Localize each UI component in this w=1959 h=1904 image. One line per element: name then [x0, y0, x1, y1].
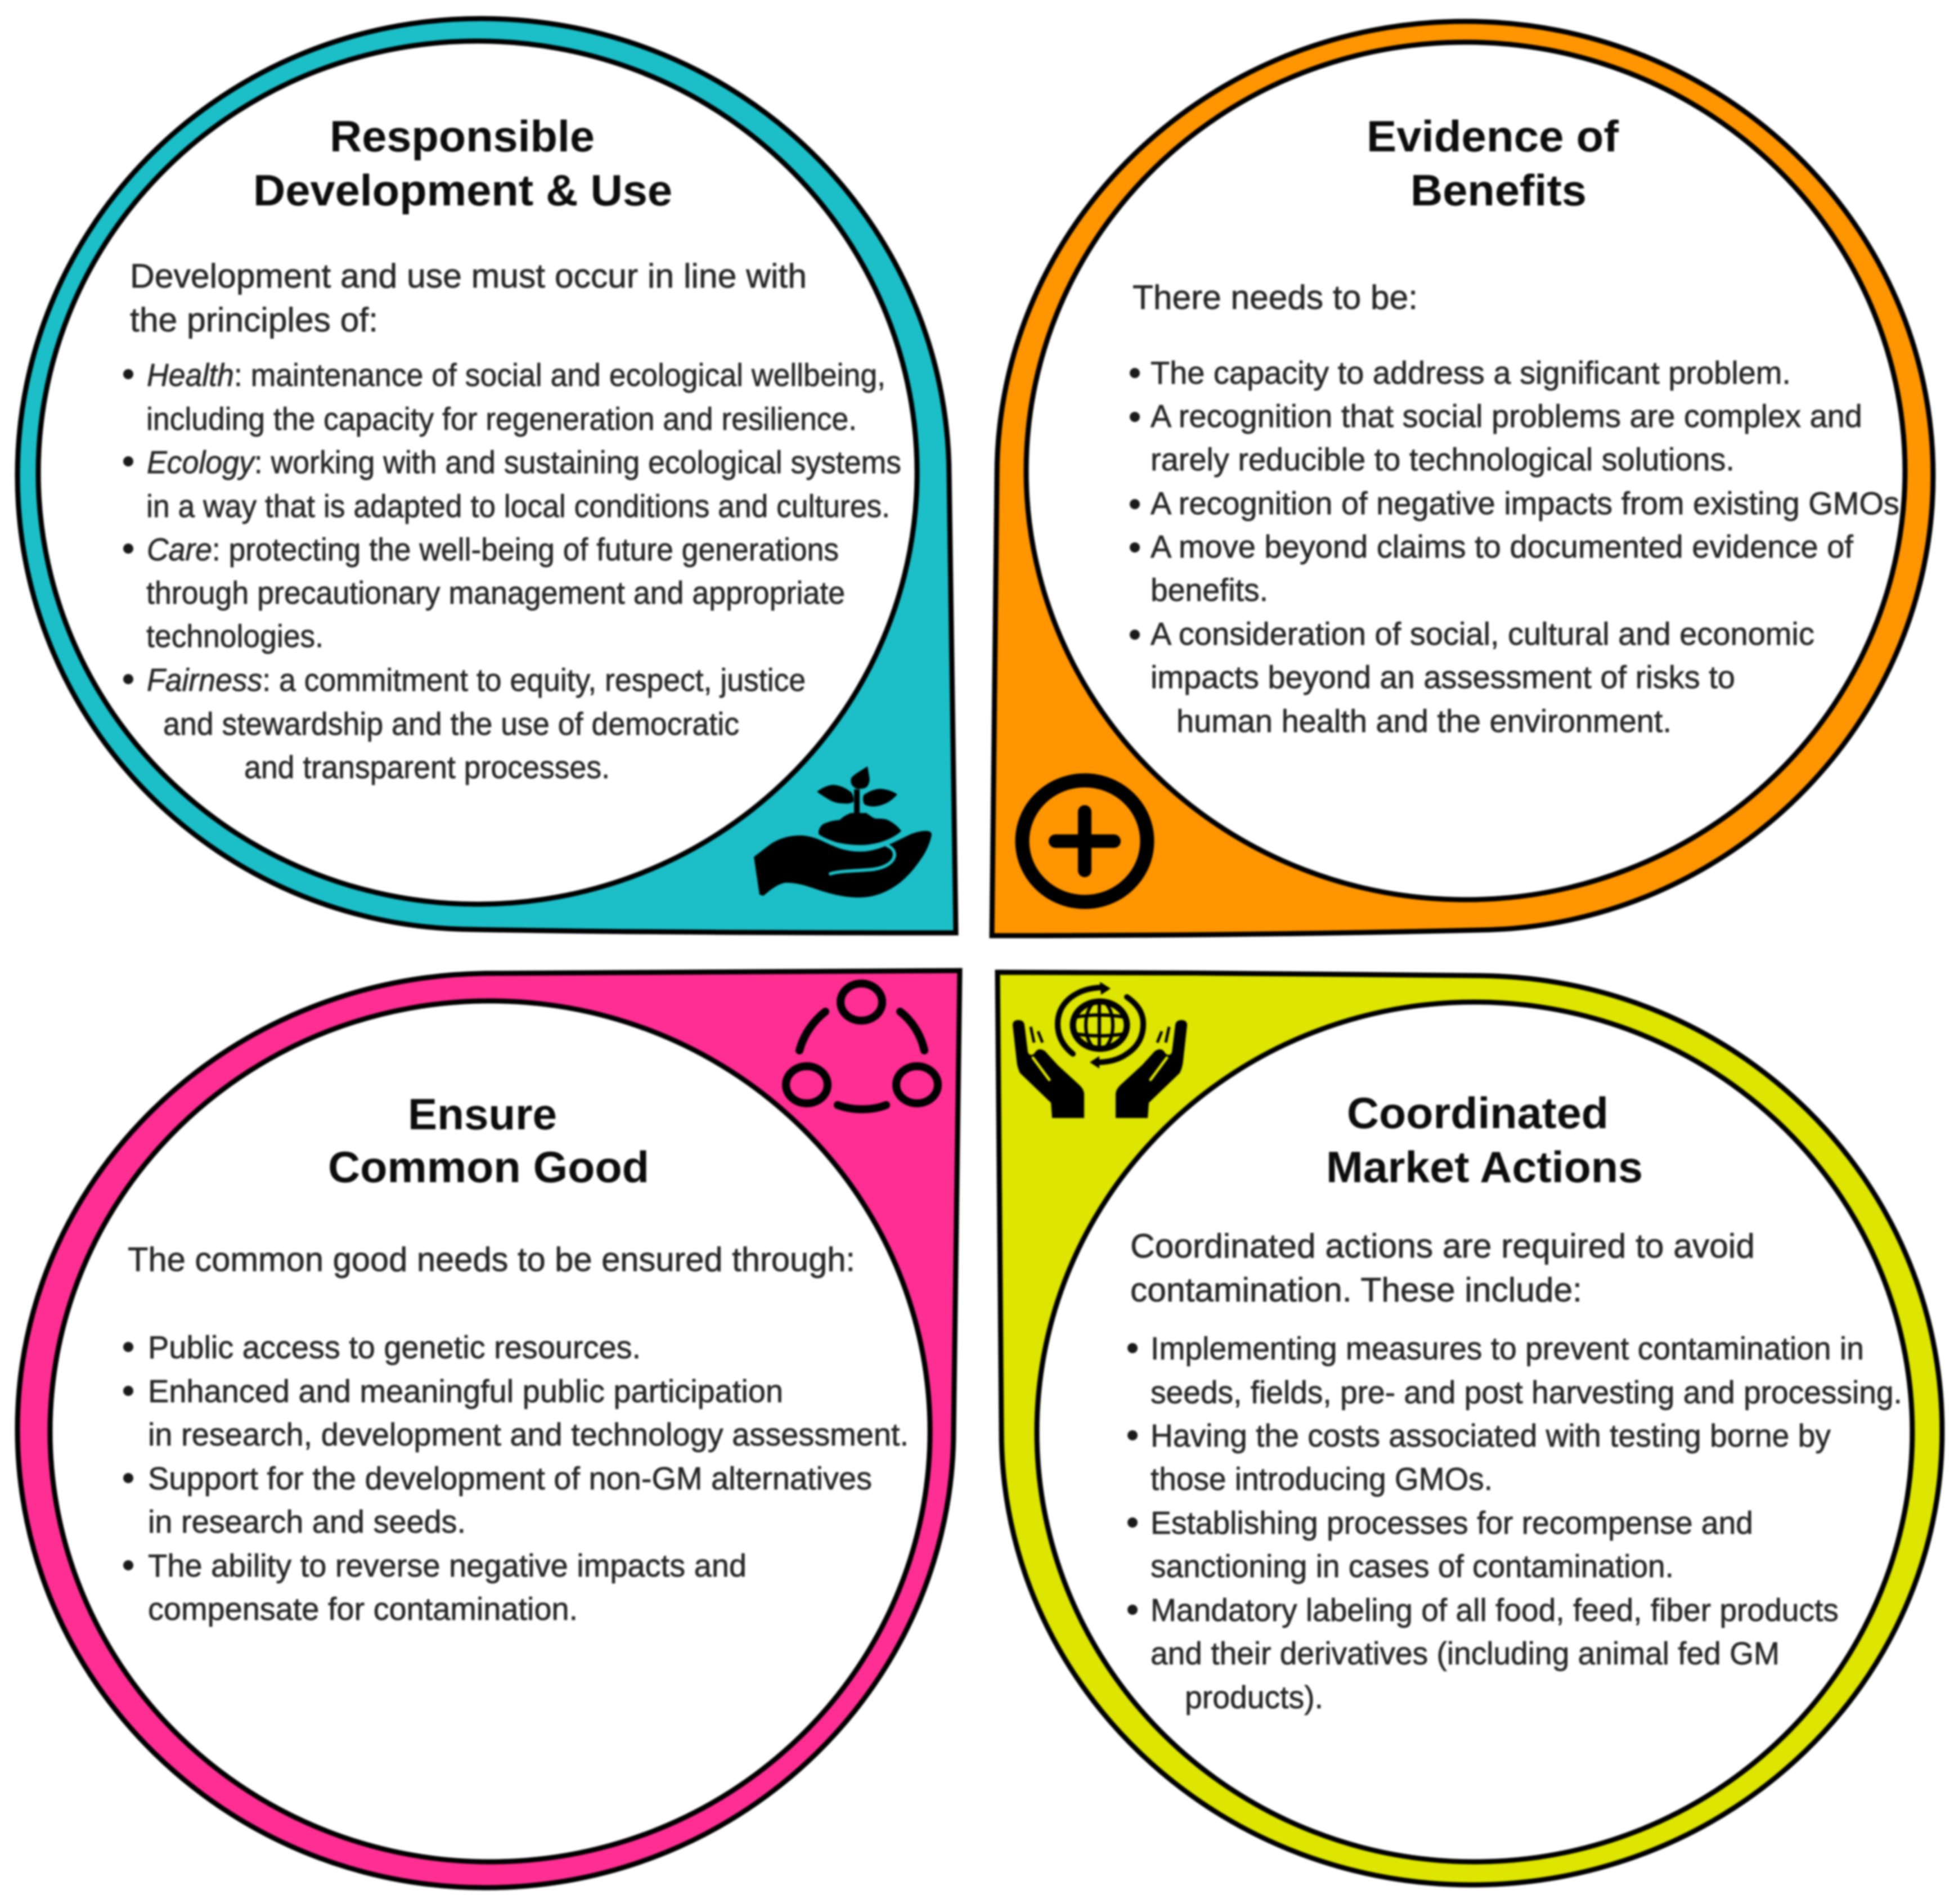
bullet list: A consideration of social, cultural and economic [1151, 616, 1814, 652]
heading: Coordinated [1347, 1088, 1608, 1138]
bullet list: Mandatory labeling of all food, feed, fiber products [1151, 1592, 1839, 1628]
icon: hands holding globe [1013, 982, 1187, 1118]
heading: Ensure [408, 1089, 557, 1139]
heading [1367, 111, 1619, 215]
bullet list: Health: maintenance of social and ecological wellbeing, [147, 357, 886, 393]
icon: plus in circle [1022, 780, 1147, 902]
bullet list: those introducing GMOs. [1151, 1461, 1493, 1497]
bullet list: Care: protecting the well-being of future generations [147, 532, 839, 568]
bullet list: in research and seeds. [148, 1504, 466, 1540]
intro text: The common good needs to be ensured through: [128, 1241, 855, 1278]
bullet list: Enhanced and meaningful public participation [148, 1373, 783, 1409]
white circle [50, 1001, 930, 1862]
bullet list: Having the costs associated with testing borne by [1151, 1418, 1831, 1454]
bullet list: including the capacity for regeneration and resilience. [146, 401, 857, 437]
icon: hand holding seedling [754, 766, 932, 897]
bullet list: and transparent processes. [244, 749, 610, 785]
heading: Common Good [328, 1142, 649, 1192]
teal drop shape [17, 19, 956, 933]
heading: Evidence of [1367, 111, 1619, 161]
bullet list: human health and the environment. [1176, 703, 1672, 739]
bullet list: Support for the development of non-GM alternatives [148, 1461, 872, 1497]
bullet list: in research, development and technology assessment. [148, 1417, 909, 1453]
heading [328, 1089, 649, 1192]
bullet list [1127, 1331, 1902, 1716]
orange drop shape [992, 21, 1933, 936]
bullet list: rarely reducible to technological solutions. [1151, 442, 1735, 478]
white circle [38, 41, 917, 904]
bullet list: in a way that is adapted to local conditions and cultures. [146, 488, 890, 524]
bullet list: Fairness: a commitment to equity, respect, justice [147, 662, 806, 698]
bullet list: Implementing measures to prevent contamination in [1151, 1331, 1864, 1367]
bullet list [1130, 355, 1899, 739]
intro text: the principles of: [130, 301, 378, 339]
intro text: contamination. These include: [1130, 1271, 1582, 1309]
pink drop shape [17, 971, 960, 1888]
bullet list: Public access to genetic resources. [148, 1330, 641, 1366]
bullet list: Ecology: working with and sustaining ecological systems [147, 444, 901, 481]
bullet list: through precautionary management and appropriate [146, 575, 845, 611]
bullet list: seeds, fields, pre- and post harvesting and processing. [1151, 1375, 1902, 1411]
lime drop shape [998, 972, 1942, 1885]
panel: responsible development and use [17, 19, 956, 933]
heading: Benefits [1410, 165, 1587, 215]
heading [1326, 1088, 1643, 1192]
bullet list: A move beyond claims to documented evidence of [1151, 529, 1853, 565]
bullet list: sanctioning in cases of contamination. [1151, 1548, 1674, 1584]
intro text [130, 257, 807, 339]
heading [253, 111, 672, 215]
bullet list: products). [1185, 1680, 1323, 1716]
bullet list: The capacity to address a significant problem. [1151, 355, 1791, 391]
bullet list: and their derivatives (including animal fed GM [1151, 1636, 1780, 1672]
bullet list: technologies. [146, 618, 323, 654]
heading: Responsible [330, 111, 595, 161]
intro text: Development and use must occur in line with [130, 257, 807, 295]
bullet list [123, 1330, 909, 1627]
panel: ensure common good [17, 971, 960, 1888]
bullet list [123, 357, 901, 785]
bullet list: A recognition that social problems are complex and [1151, 398, 1862, 434]
intro text: There needs to be: [1133, 279, 1418, 316]
heading: Market Actions [1326, 1142, 1643, 1192]
white circle [1037, 1002, 1912, 1862]
heading: Development & Use [253, 165, 672, 215]
panel: evidence of benefits [992, 21, 1933, 936]
white circle [1026, 42, 1905, 900]
bullet list: compensate for contamination. [148, 1591, 578, 1627]
bullet list: benefits. [1151, 572, 1268, 608]
icon: three linked circles [786, 984, 938, 1110]
panel: coordinated market actions [998, 972, 1942, 1885]
bullet list: Establishing processes for recompense and [1151, 1505, 1753, 1541]
intro text [1130, 1227, 1755, 1309]
bullet list: and stewardship and the use of democratic [163, 706, 739, 742]
bullet list: The ability to reverse negative impacts and [148, 1548, 747, 1584]
intro text: Coordinated actions are required to avoid [1130, 1227, 1755, 1265]
bullet list: A recognition of negative impacts from existing GMOs [1151, 486, 1899, 522]
bullet list: impacts beyond an assessment of risks to [1151, 659, 1735, 695]
